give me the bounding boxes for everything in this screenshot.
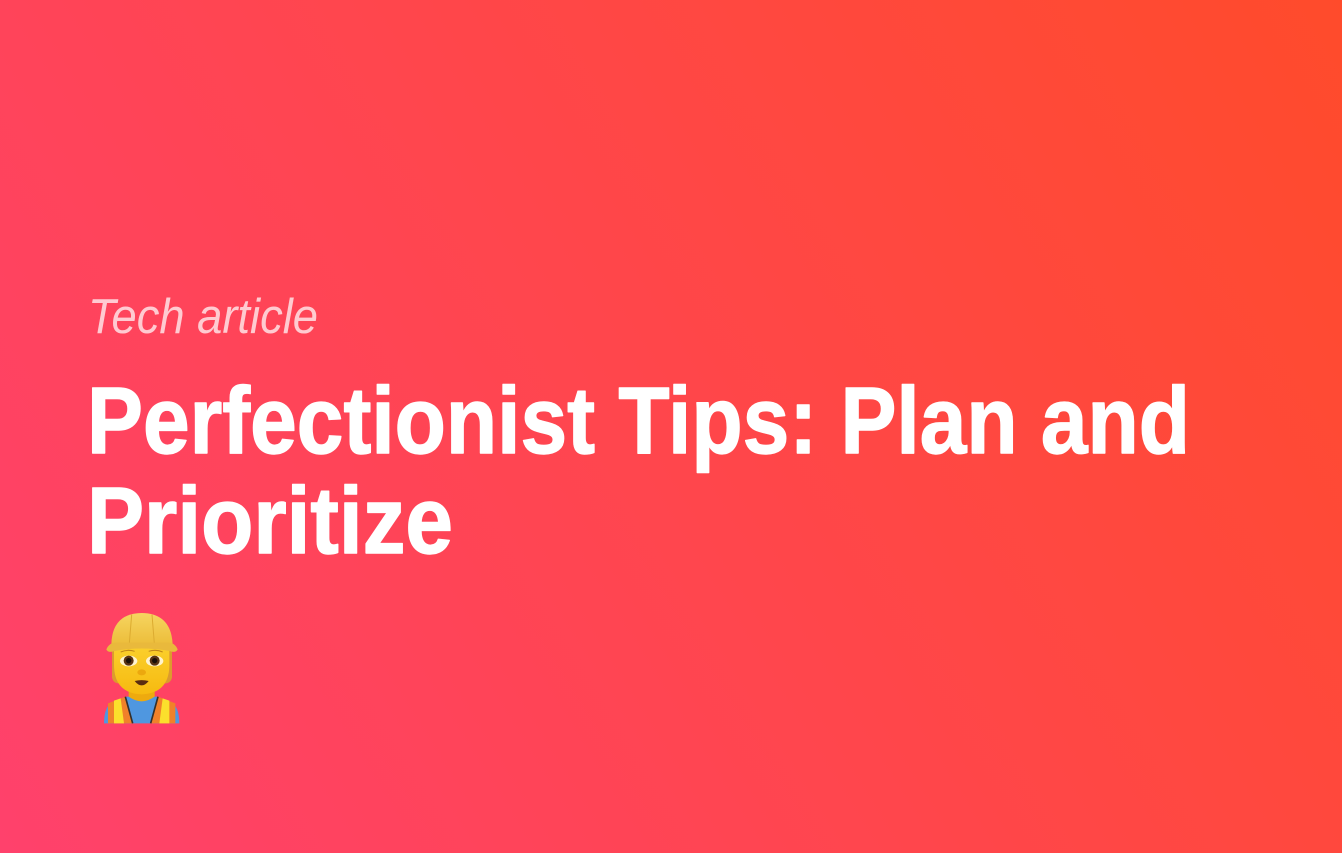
eyes <box>120 656 163 666</box>
mouth <box>135 680 149 685</box>
nose <box>137 669 146 675</box>
torso shirt <box>104 697 179 723</box>
title: Prioritize <box>87 468 453 574</box>
hair <box>112 650 172 683</box>
kicker: Tech article: Tech article <box>88 290 318 344</box>
icon: construction worker emoji <box>104 613 179 723</box>
helmet dome <box>111 613 173 645</box>
helmet brim <box>106 643 178 652</box>
head <box>114 647 169 694</box>
safety vest <box>108 697 175 723</box>
title <box>87 368 1190 574</box>
neck <box>129 687 155 701</box>
helmet ridge <box>129 615 154 643</box>
title: Perfectionist Tips: Plan and <box>87 368 1190 474</box>
eyebrows <box>121 650 163 652</box>
